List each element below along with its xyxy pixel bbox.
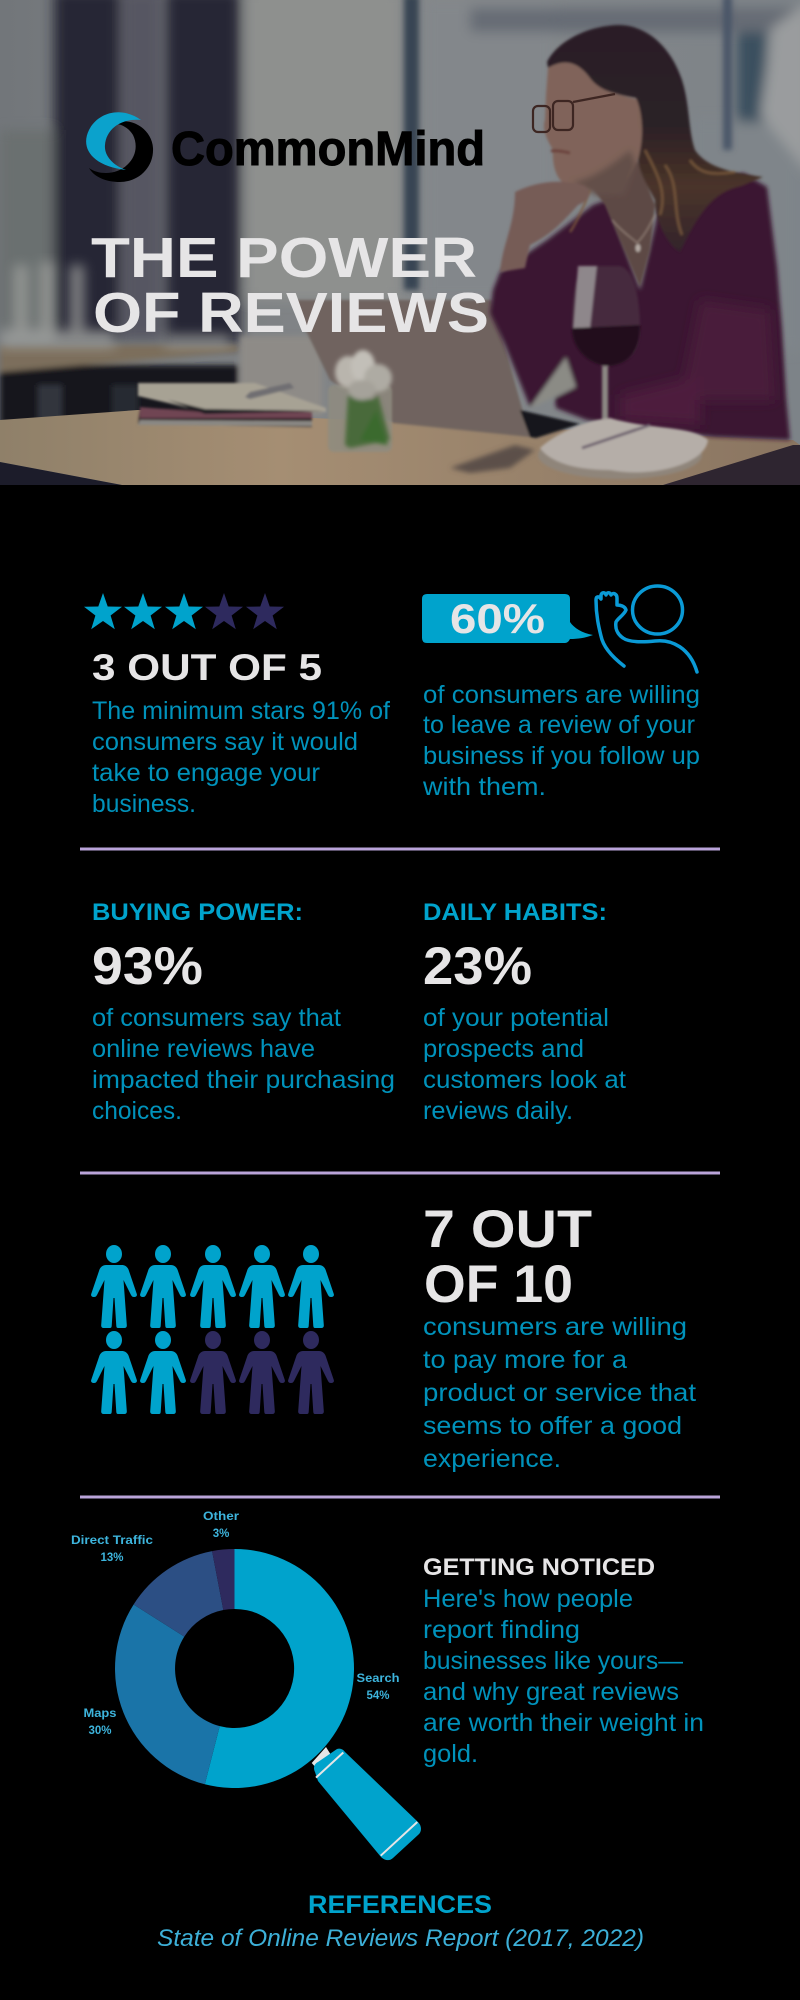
text block: to leave a review of your <box>423 711 695 739</box>
citation: State of Online Reviews Report (2017, 2022) <box>157 1925 644 1952</box>
panel: getting noticed <box>423 1554 704 1768</box>
text block: The minimum stars 91% of <box>92 697 390 725</box>
text block: of consumers are willing <box>423 681 700 709</box>
text block: experience. <box>423 1445 561 1473</box>
text block: customers look at <box>423 1066 626 1094</box>
lips <box>551 151 570 153</box>
text block: take to engage your <box>92 759 320 787</box>
segment: Other 3% <box>212 1549 234 1610</box>
hand and forearm <box>500 182 589 272</box>
magnifying glass handle <box>312 1747 421 1860</box>
text block: consumers say it would <box>92 728 358 756</box>
heading: 3 OUT OF 5 <box>92 647 322 688</box>
label: Direct Traffic: Direct Traffic <box>71 1535 154 1547</box>
text block: business if you follow up <box>423 742 700 770</box>
callout: 60% speech bubble <box>422 594 593 643</box>
text block: to pay more for a <box>423 1346 627 1374</box>
table <box>0 410 800 485</box>
text block: product or service that <box>423 1379 696 1407</box>
label: Other <box>203 1511 240 1540</box>
title <box>91 226 489 345</box>
text block: are worth their weight in <box>423 1709 704 1737</box>
text block: Here's how people <box>423 1585 633 1613</box>
panel: 60% willing to leave a review <box>422 586 700 801</box>
heading: 7 OUT <box>423 1200 592 1259</box>
label: Search: 54% <box>366 1690 390 1702</box>
label: Other: Other <box>203 1511 240 1523</box>
stat: 93%: 93% <box>92 937 203 996</box>
text block: business. <box>92 790 196 818</box>
icon: ten people, seven highlighted <box>91 1245 334 1414</box>
segment: Maps 30% <box>115 1604 220 1784</box>
heading <box>423 1200 592 1314</box>
heading: BUYING POWER: <box>92 899 303 926</box>
heading: DAILY HABITS: <box>423 899 607 926</box>
label: Maps <box>84 1708 116 1737</box>
text block: consumers are willing <box>423 1313 687 1341</box>
label: Direct Traffic <box>71 1535 154 1564</box>
text block: of consumers say that <box>92 1004 341 1032</box>
panel: 3 out of 5 stars <box>84 593 390 818</box>
donut chart inside magnifying glass <box>71 1511 421 1860</box>
text block <box>422 681 700 801</box>
heading: GETTING NOTICED <box>423 1554 655 1581</box>
label: Search: Search <box>356 1673 400 1685</box>
heading: OF 10 <box>424 1255 573 1314</box>
label: Search <box>356 1673 400 1702</box>
gap between arm and wine glass <box>530 357 576 408</box>
icon: person raising hand <box>596 586 697 672</box>
panel: buying power <box>92 899 395 1125</box>
text block: and why great reviews <box>423 1678 679 1706</box>
label: Maps: Maps <box>84 1708 116 1720</box>
notebooks and pen <box>138 383 326 427</box>
panel: 7 out of 10 <box>423 1200 696 1473</box>
segment: Search 54% <box>205 1549 354 1788</box>
face <box>544 63 645 192</box>
text block: impacted their purchasing <box>92 1066 395 1094</box>
segment: Direct Traffic 13% <box>134 1551 223 1637</box>
text block: seems to offer a good <box>423 1412 682 1440</box>
references <box>157 1891 644 1952</box>
label: Direct Traffic: 13% <box>100 1552 124 1564</box>
hair <box>547 25 763 252</box>
text block: with them. <box>422 773 546 801</box>
title: OF REVIEWS <box>93 281 489 345</box>
text block: choices. <box>92 1097 182 1125</box>
woman <box>490 173 790 440</box>
text block <box>92 1004 395 1125</box>
icon: star rating <box>84 593 284 629</box>
wine glass <box>572 266 640 421</box>
text block <box>423 1004 626 1125</box>
text block: online reviews have <box>92 1035 315 1063</box>
flower vase <box>328 350 392 452</box>
logo: CommonMind <box>86 112 485 182</box>
text block <box>423 1313 696 1473</box>
logo ring mark <box>86 112 153 182</box>
title: THE POWER <box>91 226 477 290</box>
callout: 60% speech bubble: 60% <box>450 595 545 642</box>
glasses <box>533 94 615 132</box>
window frame <box>404 0 419 290</box>
text block <box>423 1585 704 1768</box>
text block: reviews daily. <box>423 1097 573 1125</box>
label: Maps: 30% <box>88 1725 112 1737</box>
hair curls <box>570 150 735 235</box>
stat: 23%: 23% <box>423 937 532 996</box>
text block <box>92 697 390 818</box>
text block: businesses like yours— <box>423 1647 683 1675</box>
laptop <box>291 300 580 438</box>
neck and chest <box>590 160 655 287</box>
text block: of your potential <box>423 1004 609 1032</box>
logo wordmark: CommonMind <box>171 123 485 176</box>
text block: report finding <box>423 1616 580 1644</box>
necklace <box>612 215 655 243</box>
blouse <box>490 173 790 440</box>
plate and cutlery <box>450 418 708 479</box>
back table and blurred glasses <box>0 365 238 425</box>
neck shadow <box>572 150 636 196</box>
text block: prospects and <box>423 1035 584 1063</box>
label: Other: 3% <box>213 1528 229 1540</box>
text block: gold. <box>423 1740 478 1768</box>
hero photo: woman at a restaurant table with a laptop <box>0 0 800 485</box>
ear <box>637 99 657 137</box>
heading: REFERENCES <box>308 1891 492 1919</box>
panel: daily habits <box>423 899 626 1125</box>
